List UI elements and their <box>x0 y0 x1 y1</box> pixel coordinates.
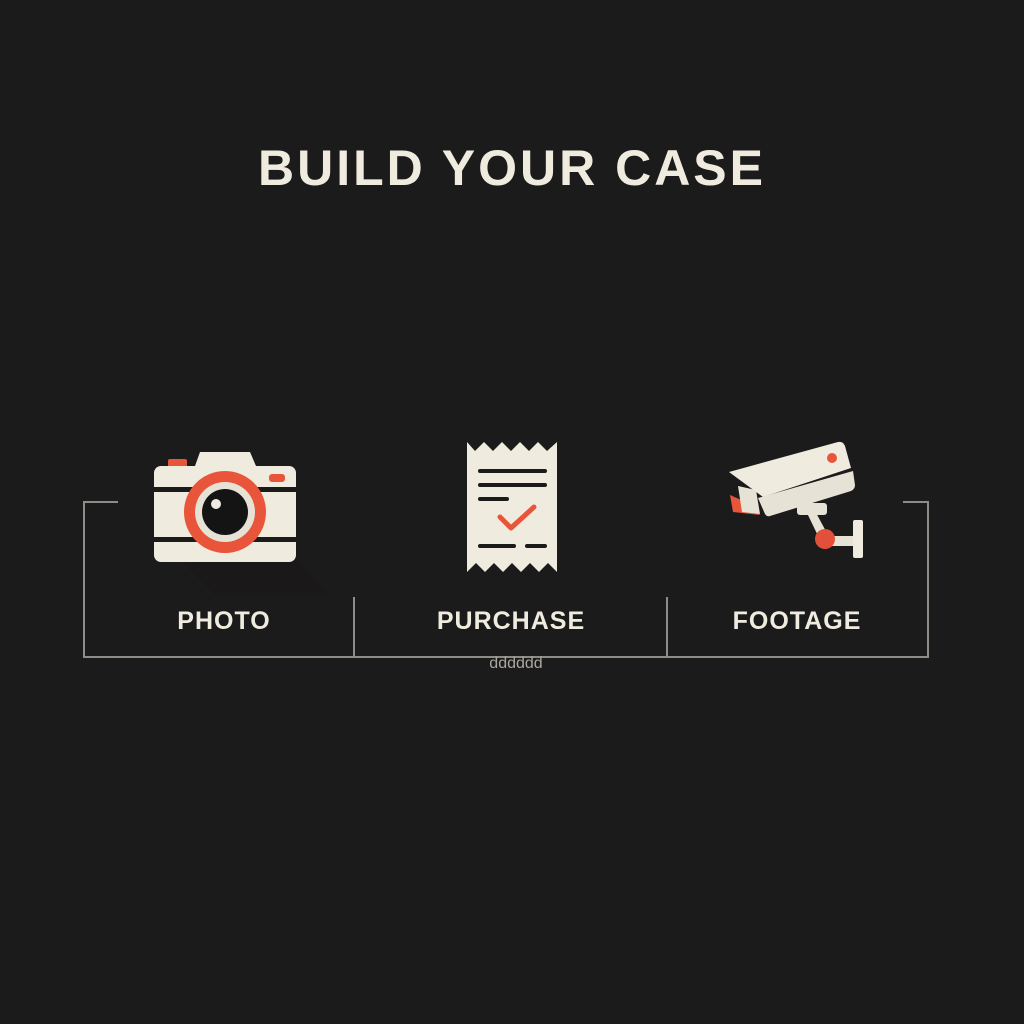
small text: dddddd <box>489 655 543 672</box>
title: BUILD YOUR CASE <box>258 140 766 196</box>
label: footage: FOOTAGE <box>733 607 861 635</box>
label: photo: PHOTO <box>177 607 271 635</box>
label: purchase: PURCHASE <box>437 607 585 635</box>
